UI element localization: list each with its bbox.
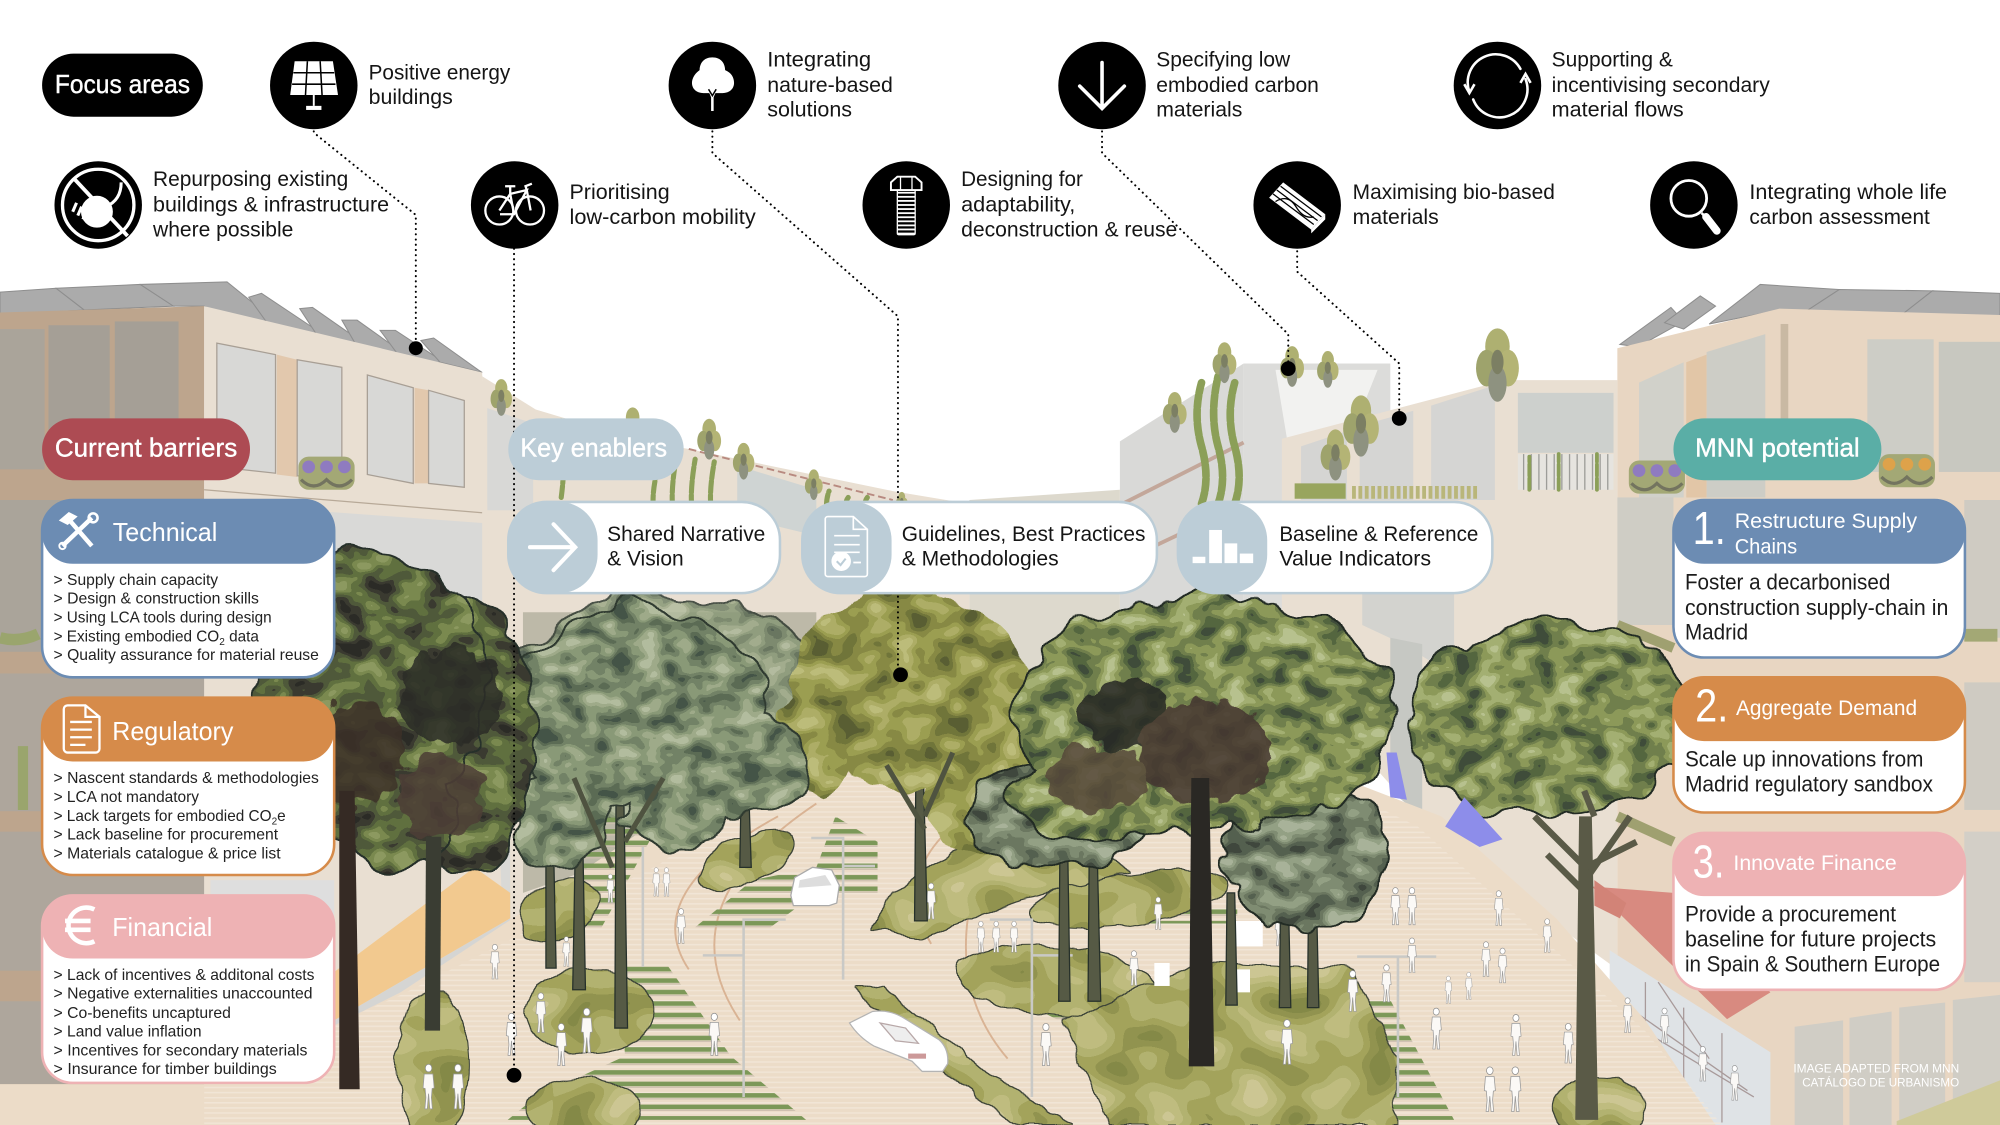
enabler: shared narrative: Shared Narrative <box>607 521 765 546</box>
green paving stripes <box>508 816 1454 1120</box>
panel: innovate finance: in Spain & Southern Europe <box>1685 951 1940 976</box>
panel: regulatory barriers: > Materials catalogue & price list <box>54 845 281 862</box>
dark shade in main canopy <box>1046 681 1272 811</box>
left building <box>0 282 510 1125</box>
panel: technical barriers: > Supply chain capacity <box>54 572 218 589</box>
enabler: baseline indicators <box>1178 502 1492 593</box>
panel: technical barriers: > Design & construction skills <box>54 591 259 608</box>
panel: restructure supply chains: 1. <box>1693 502 1726 554</box>
focus area: adaptability and reuse: deconstruction & reuse <box>961 217 1177 242</box>
panel: financial barriers: > Co-benefits uncaptured <box>54 1005 231 1022</box>
panel: restructure supply chains: Restructure Supply <box>1735 508 1917 533</box>
panel: restructure supply chains: Chains <box>1735 534 1797 559</box>
focus area: secondary material flows <box>1454 42 1770 129</box>
illustration: street with buildings and trees <box>0 282 2000 1125</box>
tree trunks back row <box>546 778 1319 1028</box>
heading pill: key enablers <box>508 418 684 480</box>
panel: innovate finance: Provide a procurement <box>1685 902 1897 927</box>
canopy: right tree <box>1407 620 1693 816</box>
enabler: guidelines: Guidelines, Best Practices <box>902 521 1146 546</box>
focus area: low embodied carbon materials: embodied carbon <box>1156 72 1319 97</box>
panel: financial barriers: > Negative externalities unaccounted <box>54 986 313 1003</box>
heading pill: focus areas <box>42 54 203 117</box>
heading pill: key enablers: Key enablers <box>520 435 667 463</box>
focus area: secondary material flows: Supporting & <box>1552 47 1673 72</box>
panel: restructure supply chains: Foster a decarbonised <box>1685 569 1890 594</box>
focus area: low embodied carbon materials <box>1058 42 1319 129</box>
street lamps <box>643 838 1436 1097</box>
focus area: low embodied carbon materials: Specifying low <box>1156 47 1291 72</box>
focus area: nature-based solutions: Integrating <box>767 47 871 72</box>
focus area: low-carbon mobility: Prioritising <box>570 179 670 204</box>
focus area: positive energy buildings: buildings <box>369 84 453 109</box>
panel: financial barriers: > Incentives for secondary materials <box>54 1042 308 1059</box>
panel: innovate finance: 3. <box>1693 836 1724 888</box>
icon: magnifying glass <box>1650 161 1738 249</box>
icon: euro <box>65 908 94 943</box>
heading pill: MNN potential <box>1673 418 1881 480</box>
far canopy backdrop <box>497 593 829 823</box>
focus area: positive energy buildings: Positive energy <box>369 59 510 84</box>
image credit: IMAGE ADAPTED FROM MNN <box>1793 1061 1959 1075</box>
enabler: guidelines <box>802 502 1157 593</box>
enabler: baseline indicators: Baseline & Reference <box>1279 521 1478 546</box>
canopy: main large tree <box>1014 593 1394 842</box>
icon: timber block <box>1253 161 1341 249</box>
panel: technical barriers: > Quality assurance for material reuse <box>54 647 319 664</box>
canopy: left dark tree <box>385 596 533 871</box>
icon: circular arrows <box>1454 42 1541 129</box>
focus area: low-carbon mobility <box>471 161 756 249</box>
panel: financial barriers: > Lack of incentives & additonal costs <box>54 967 315 984</box>
heading pill: MNN potential: MNN potential <box>1695 435 1860 463</box>
focus area: repurposing existing buildings: buildings & infrastructure <box>153 192 389 217</box>
canopy: olive-gray middle tree <box>964 765 1148 867</box>
canopy: backing olive tree <box>778 589 1046 855</box>
panel: technical barriers: > Existing embodied CO <box>54 628 222 645</box>
panel: regulatory barriers: > LCA not mandatory <box>54 789 199 806</box>
focus area: whole life carbon assessment: carbon assessment <box>1749 204 1930 229</box>
icon: bicycle <box>471 161 558 249</box>
panel: technical barriers: 2 <box>219 637 225 648</box>
icon: solar panel <box>270 42 358 129</box>
panel: financial barriers: > Insurance for timber buildings <box>54 1061 277 1078</box>
panel: regulatory barriers: e <box>277 808 286 825</box>
icon: document <box>64 705 99 753</box>
panel: restructure supply chains: construction supply-chain in <box>1685 595 1948 620</box>
tree trunks front <box>339 753 1636 1120</box>
focus area: bio-based materials: Maximising bio-based <box>1353 179 1555 204</box>
focus area: nature-based solutions: solutions <box>767 97 852 122</box>
panel: regulatory barriers: > Lack targets for embodied CO <box>54 808 274 825</box>
focus area: repurposing existing buildings: where possible <box>152 217 293 242</box>
planted mounds <box>398 816 1644 1125</box>
focus area: bio-based materials: materials <box>1353 204 1439 229</box>
panel: regulatory barriers <box>42 698 334 875</box>
car near <box>849 1011 948 1071</box>
rooftop solar panels right <box>1620 284 2000 347</box>
icon: checklist document <box>825 517 867 577</box>
icon: arrow <box>530 524 575 570</box>
focus area: adaptability and reuse: Designing for <box>961 166 1083 191</box>
focus area: low-carbon mobility: low-carbon mobility <box>570 204 756 229</box>
panel: restructure supply chains: Madrid <box>1685 620 1748 645</box>
purple canopies behind right tree <box>1386 753 1503 847</box>
focus area: secondary material flows: material flows <box>1552 97 1684 122</box>
car far <box>791 867 839 906</box>
panel: financial barriers: > Land value inflation <box>54 1023 202 1040</box>
panel: technical barriers: > Using LCA tools during design <box>54 609 272 626</box>
focus area: repurposing existing buildings <box>54 161 389 249</box>
focus area: nature-based solutions: nature-based <box>767 72 893 97</box>
focus area: whole life carbon assessment: Integrating whole life <box>1749 179 1947 204</box>
panel: technical barriers: data <box>225 628 259 645</box>
panel: regulatory barriers: 2 <box>272 817 277 828</box>
ground and paving <box>0 753 1722 1125</box>
focus area: bio-based materials <box>1253 161 1555 249</box>
panel: innovate finance <box>1673 833 1965 990</box>
enabler: shared narrative: & Vision <box>607 546 684 571</box>
focus area: whole life carbon assessment <box>1650 161 1947 249</box>
focus area: repurposing existing buildings: Repurposing existing <box>153 166 348 191</box>
image credit: CATÁLOGO DE URBANISMO <box>1802 1075 1959 1090</box>
dotted leader lines <box>314 131 1407 1083</box>
distant buildings left <box>401 376 969 992</box>
panel: technical barriers: Technical <box>113 519 217 547</box>
people <box>423 868 1632 1111</box>
icon: bar chart <box>1193 530 1253 563</box>
panel: aggregate demand: Scale up innovations from <box>1685 747 1923 772</box>
panel: restructure supply chains <box>1673 500 1965 658</box>
enabler: guidelines: & Methodologies <box>902 546 1059 571</box>
panel: innovate finance: Innovate Finance <box>1733 850 1897 875</box>
canopy: muted tree <box>510 608 809 862</box>
focus area: low embodied carbon materials: materials <box>1156 97 1243 122</box>
dark shade in left canopies <box>311 647 506 838</box>
panel: regulatory barriers: > Nascent standards & methodologies <box>54 770 319 787</box>
panel: regulatory barriers: Regulatory <box>112 718 234 746</box>
image credit <box>1793 1061 1959 1090</box>
focus area: secondary material flows: incentivising secondary <box>1552 72 1770 97</box>
enabler: shared narrative <box>508 502 780 593</box>
panel: financial barriers: Financial <box>112 914 212 942</box>
panel: aggregate demand <box>1673 677 1965 812</box>
panel: financial barriers <box>42 895 334 1083</box>
canopy: gray lower tree <box>1226 776 1389 929</box>
right building <box>1592 284 2000 1125</box>
distant buildings right <box>969 328 1617 969</box>
heading pill: current barriers: Current barriers <box>55 435 237 463</box>
rooftop solar panels left <box>0 282 482 374</box>
icon: down arrow <box>1058 42 1146 129</box>
icon: bolt <box>862 161 950 249</box>
icon: tools <box>59 513 98 549</box>
heading pill: current barriers <box>42 418 250 480</box>
panel: aggregate demand: Madrid regulatory sandbox <box>1685 772 1933 797</box>
icon: repurposing <box>54 161 142 249</box>
panel: aggregate demand: Aggregate Demand <box>1736 695 1917 720</box>
focus area: adaptability and reuse <box>862 161 1177 249</box>
enabler: baseline indicators: Value Indicators <box>1279 546 1431 571</box>
focus area: nature-based solutions <box>669 42 893 129</box>
heading pill: focus areas: Focus areas <box>55 71 190 99</box>
canopy: far-left big tree <box>253 552 487 867</box>
icon: tree <box>669 42 756 129</box>
panel: regulatory barriers: > Lack baseline for procurement <box>54 826 279 843</box>
panel: aggregate demand: 2. <box>1695 679 1728 731</box>
panel: technical barriers <box>42 500 334 677</box>
focus area: positive energy buildings <box>270 42 510 129</box>
panel: innovate finance: baseline for future projects <box>1685 926 1936 951</box>
small white planter boxes <box>1154 921 1263 992</box>
focus area: adaptability and reuse: adaptability, <box>961 192 1075 217</box>
